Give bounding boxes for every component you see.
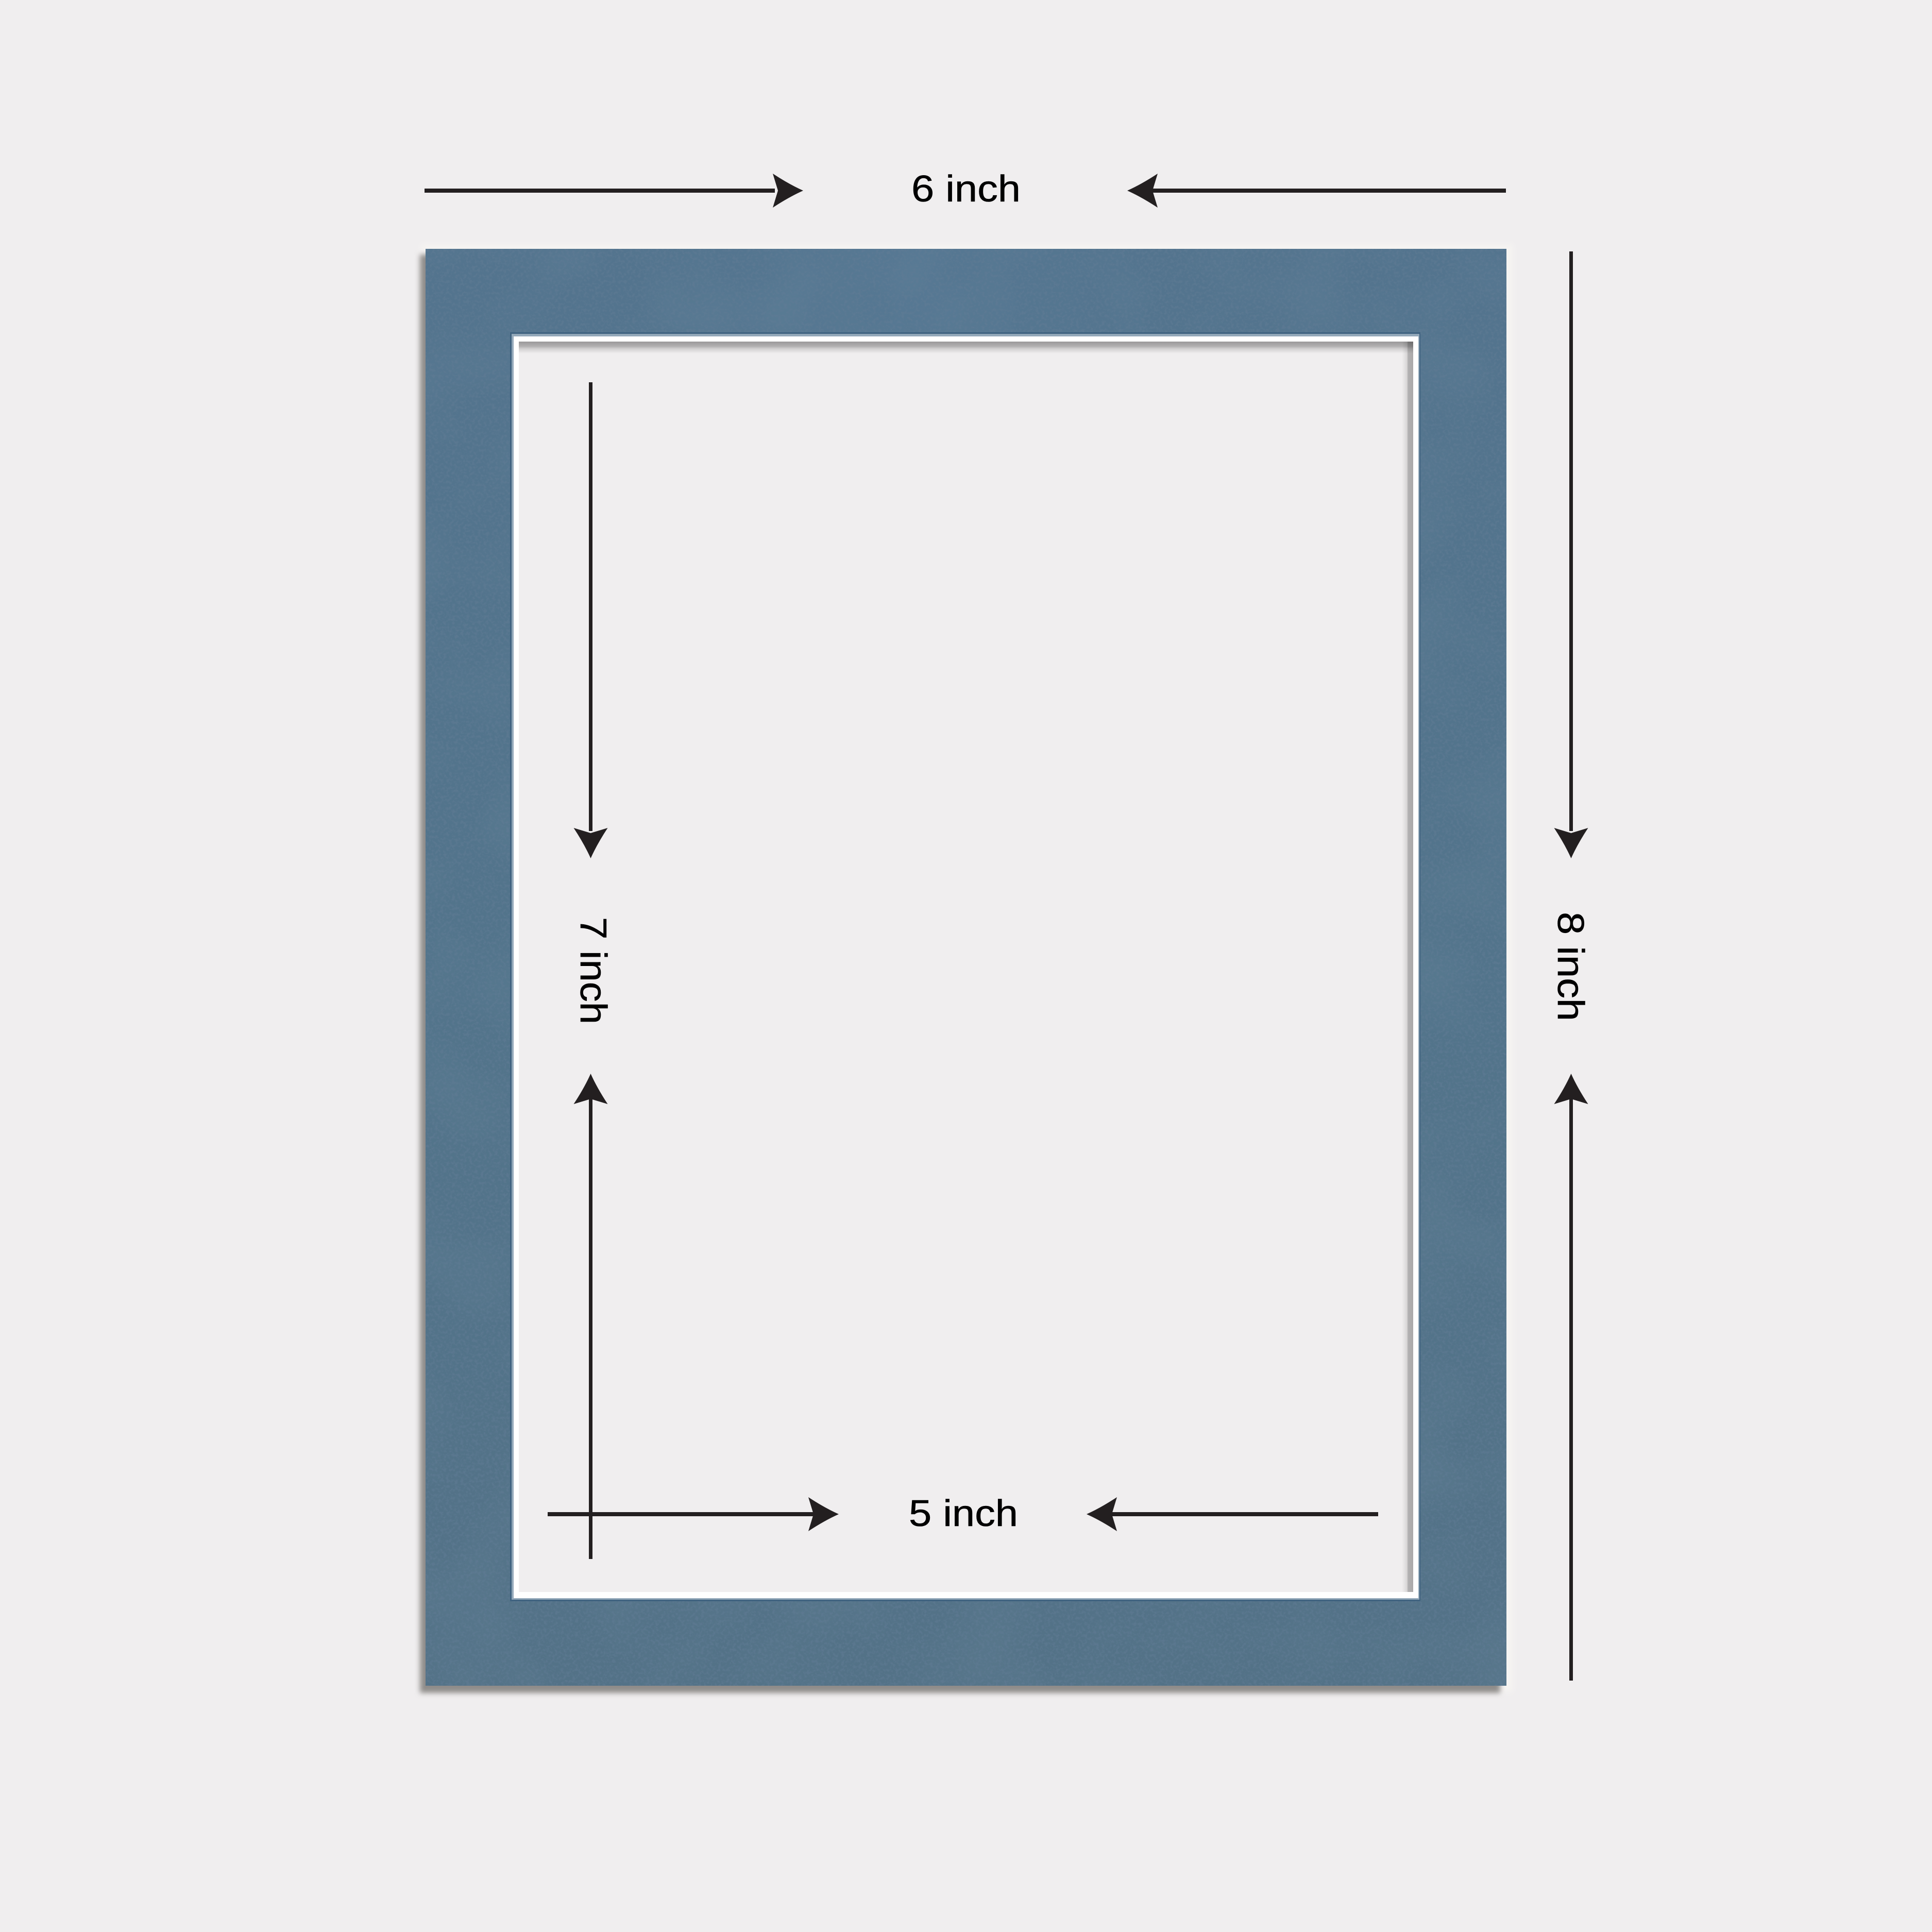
arrow: left pointing right	[425, 174, 803, 208]
arrow: left pointing right	[548, 1497, 839, 1531]
opening top shadow	[519, 342, 1413, 353]
arrow: bottom pointing up	[574, 1074, 608, 1559]
label: 6 inch: 6 inch	[911, 168, 1021, 210]
panel: mat board frame	[420, 244, 1513, 1693]
opening right shadow	[1402, 342, 1413, 1592]
blue mat surface	[426, 249, 1506, 1686]
arrow: right pointing left	[1087, 1497, 1378, 1531]
arrow: bottom pointing up	[1554, 1074, 1588, 1681]
arrow: right pointing left	[1127, 174, 1506, 208]
label: 8 inch: 8 inch	[1550, 912, 1591, 1021]
light halo around the board	[421, 244, 1513, 1692]
board drop shadow	[420, 255, 1500, 1693]
dimension: inner width 5 inch	[548, 1493, 1378, 1534]
mat paper texture	[426, 249, 1506, 1686]
mat colour variation	[426, 249, 1506, 1686]
window opening	[519, 342, 1413, 1592]
dimension: outer height 8 inch	[1550, 251, 1591, 1681]
dimension: inner height 7 inch	[572, 382, 614, 1559]
mat blotches	[426, 249, 1506, 1686]
label: 7 inch: 7 inch	[572, 917, 614, 1024]
window bevel dark edge	[510, 332, 1420, 1601]
arrow: top pointing down	[1554, 251, 1588, 858]
white window core	[514, 336, 1418, 1598]
arrow: top pointing down	[574, 382, 608, 858]
label: 5 inch: 5 inch	[909, 1493, 1018, 1534]
dimension: outer width 6 inch	[425, 168, 1506, 210]
window bevel light edge	[512, 334, 1419, 1600]
